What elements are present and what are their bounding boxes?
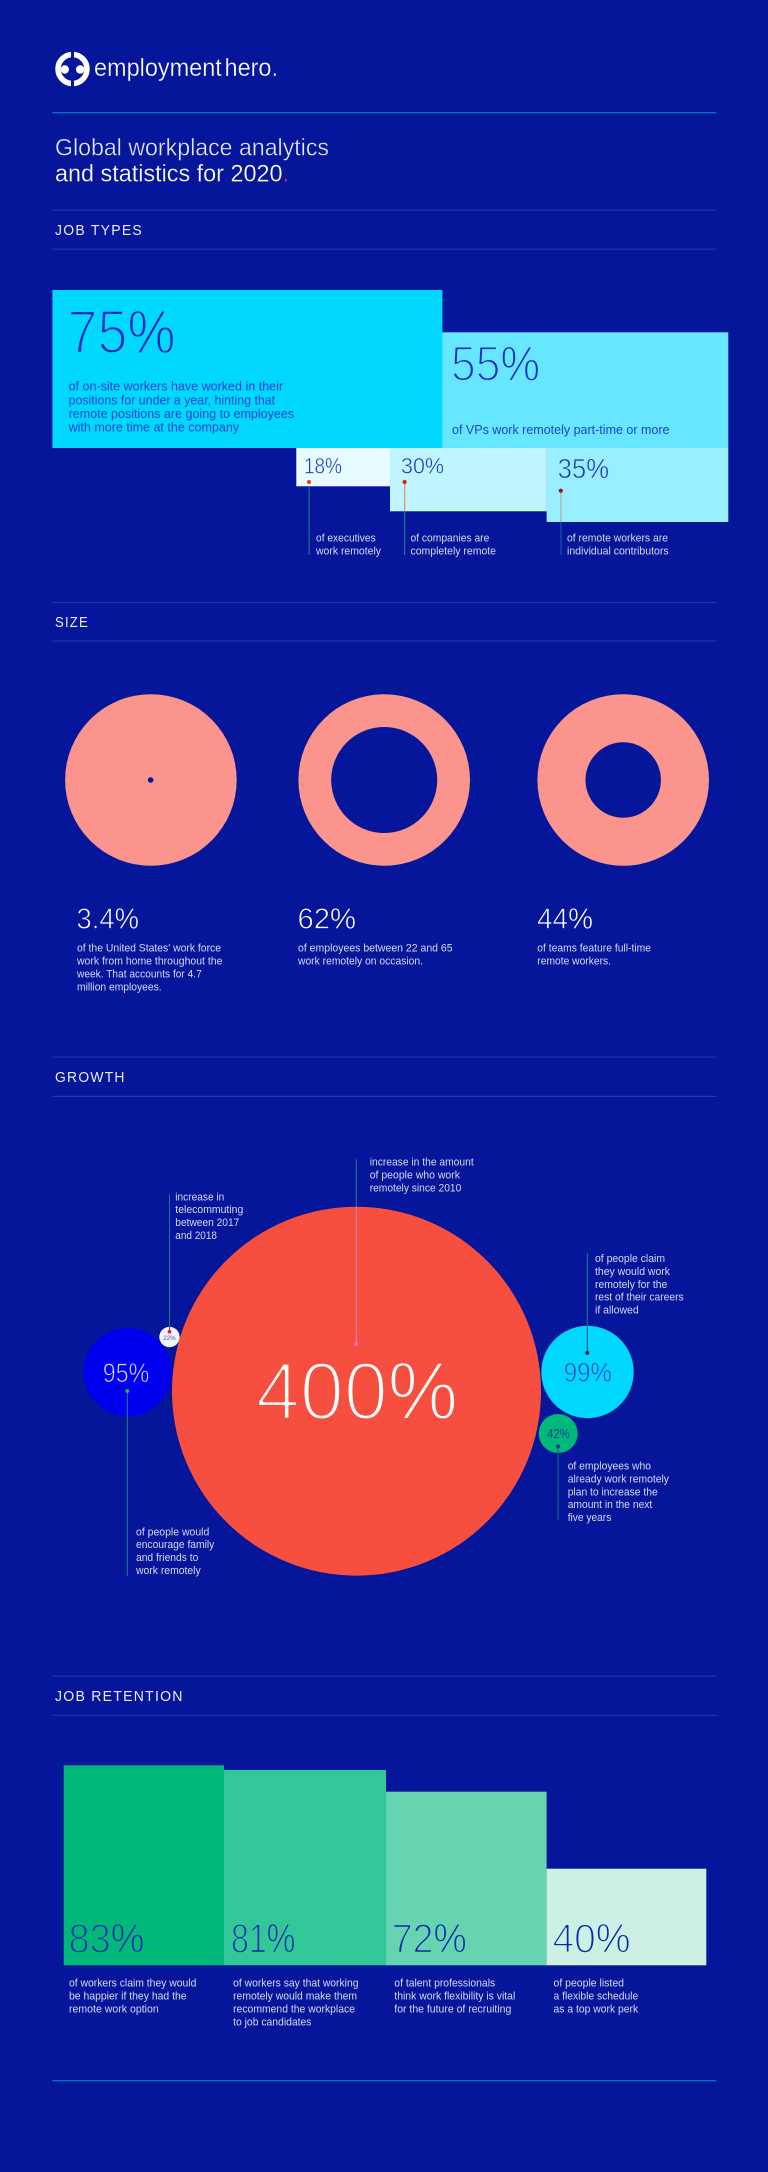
label: 22%: and 2018 xyxy=(175,1230,217,1242)
panel: growth xyxy=(84,1157,684,1577)
label: 99%: rest of their careers xyxy=(595,1292,684,1304)
label: 18%: work remotely xyxy=(315,545,381,557)
label: 18% xyxy=(315,532,381,557)
label: 18%: of executives xyxy=(316,532,376,544)
panel: 35% remote workers xyxy=(547,448,728,522)
panel: 75% on-site workers xyxy=(52,290,442,448)
stat: 62% xyxy=(297,903,453,968)
bubble: 400%: 400% xyxy=(256,1346,458,1437)
caption: 40% xyxy=(554,1977,639,2015)
panel: 75% on-site workers: remote positions are going to employees xyxy=(69,407,294,421)
bar: 40%: 40% xyxy=(552,1916,630,1962)
caption: 40%: a flexible schedule xyxy=(554,1990,638,2002)
callout: 95% leader line xyxy=(125,1389,129,1576)
bar: 83%: 83% xyxy=(68,1916,144,1962)
label: 42%: amount in the next xyxy=(568,1499,653,1511)
stat: 44% xyxy=(537,903,651,968)
title xyxy=(55,134,329,188)
stat: 62%: of employees between 22 and 65 xyxy=(298,943,453,955)
stat: 3.4%: work from home throughout the xyxy=(76,956,222,968)
bar: 72%: 72% xyxy=(392,1916,467,1962)
panel: 75% on-site workers: of on-site workers have worked in their xyxy=(69,380,283,394)
label: 30%: of companies are xyxy=(410,532,489,544)
panel: job types xyxy=(52,290,728,557)
panel: 55% VPs: of VPs work remotely part-time or more xyxy=(452,423,670,437)
stat: 3.4%: 3.4% xyxy=(76,903,139,935)
panel: 75% on-site workers: with more time at the company xyxy=(68,421,240,435)
stat: 3.4%: week. That accounts for 4.7 xyxy=(76,969,202,981)
bubble: 400% xyxy=(172,1207,541,1576)
stat: 44%: of teams feature full-time xyxy=(537,943,651,955)
icon: logo mark xyxy=(58,50,87,88)
panel: 55% VPs: 55% xyxy=(451,338,540,392)
label: 42%: plan to increase the xyxy=(568,1486,658,1498)
caption: 83% xyxy=(69,1977,196,2015)
callout: 30% leader line xyxy=(402,480,407,555)
label: 30% xyxy=(410,532,496,557)
stat: 62%: work remotely on occasion. xyxy=(297,956,423,968)
bubble: 95% xyxy=(84,1328,172,1416)
label: 99%: of people claim xyxy=(595,1253,665,1265)
bubble: 99% xyxy=(541,1326,634,1418)
bubble: 42%: 42% xyxy=(547,1427,570,1441)
label: 95%: encourage family xyxy=(136,1539,215,1551)
caption: 81%: to job candidates xyxy=(233,2016,312,2028)
label: 35% xyxy=(567,532,669,557)
caption: 72% xyxy=(394,1977,515,2015)
label: 42%: of employees who xyxy=(568,1461,651,1473)
panel: size xyxy=(65,694,709,994)
stat: 44%: 44% xyxy=(537,903,593,935)
chart: 3.4% donut xyxy=(65,694,237,866)
label: 99%: they would work xyxy=(595,1266,670,1278)
heading: size: SIZE xyxy=(55,615,89,631)
bar: 40% xyxy=(547,1869,706,1965)
label: 22%: between 2017 xyxy=(175,1217,239,1229)
label: 400%: remotely since 2010 xyxy=(370,1182,461,1194)
bubble: 22%: 22% xyxy=(163,1335,176,1342)
logo wordmark: employment hero. xyxy=(94,54,278,82)
label: 22%: telecommuting xyxy=(175,1204,243,1216)
caption: 72%: for the future of recruiting xyxy=(394,2003,511,2015)
caption: 81%: of workers say that working xyxy=(233,1977,358,1989)
label: 35%: individual contributors xyxy=(567,545,669,557)
panel: 55% VPs xyxy=(442,332,728,448)
caption: 40%: as a top work perk xyxy=(554,2003,639,2015)
label: 42% xyxy=(568,1461,669,1524)
panel: 18% executives: 18% xyxy=(304,454,342,479)
stat: 44%: remote workers. xyxy=(537,956,611,968)
label: 95%: and friends to xyxy=(136,1552,198,1564)
panel: 75% on-site workers: 75% xyxy=(68,298,176,366)
label: 22%: increase in xyxy=(175,1191,224,1203)
label: 400%: increase in the amount xyxy=(370,1157,475,1169)
stat: 3.4%: million employees. xyxy=(77,982,162,994)
label: 22% xyxy=(175,1191,243,1242)
label: 95% xyxy=(135,1526,215,1577)
caption: 72%: think work flexibility is vital xyxy=(394,1990,515,2002)
bubble: 42% xyxy=(539,1414,578,1453)
panel: 35% remote workers: 35% xyxy=(558,453,609,484)
label: 95%: work remotely xyxy=(135,1565,201,1577)
panel: 30% companies: 30% xyxy=(401,454,444,479)
caption: 83%: remote work option xyxy=(69,2003,159,2015)
callout: 42% leader line xyxy=(556,1444,560,1520)
heading: job retention: JOB RETENTION xyxy=(55,1689,184,1705)
label: 30%: completely remote xyxy=(410,545,496,557)
bar: 83% xyxy=(64,1765,224,1965)
label: 99% xyxy=(595,1253,684,1317)
panel: 75% on-site workers: positions for under a year, hinting that xyxy=(69,393,276,407)
label: 99%: remotely for the xyxy=(595,1279,667,1291)
bar: 81% xyxy=(224,1770,386,1965)
chart: 44% donut xyxy=(537,694,709,866)
heading: job types: JOB TYPES xyxy=(55,223,143,239)
panel: 30% companies xyxy=(390,448,547,511)
heading: growth: GROWTH xyxy=(55,1070,126,1086)
label: 95%: of people would xyxy=(136,1526,209,1538)
callout: 18% leader line xyxy=(307,480,311,555)
caption: 83%: of workers claim they would xyxy=(69,1977,196,1989)
stat: 62%: 62% xyxy=(298,903,356,935)
title: Global workplace analytics xyxy=(55,134,329,162)
label: 400%: of people who work xyxy=(370,1170,460,1182)
caption: 83%: be happier if they had the xyxy=(69,1990,187,2002)
caption: 72%: of talent professionals xyxy=(394,1977,496,1989)
callout: 35% leader line xyxy=(559,489,563,555)
label: 400% xyxy=(370,1157,475,1194)
callout: 99% leader line xyxy=(585,1253,589,1355)
bar: 81%: 81% xyxy=(231,1916,295,1962)
caption: 81% xyxy=(233,1977,358,2028)
label: 42%: already work remotely xyxy=(568,1474,669,1486)
caption: 40%: of people listed xyxy=(554,1977,624,1989)
bar: 72% xyxy=(386,1792,547,1965)
caption: 81%: remotely would make them xyxy=(233,1990,357,2002)
bubble: 95%: 95% xyxy=(103,1358,149,1388)
chart: 62% donut xyxy=(298,694,470,866)
caption: 81%: recommend the workplace xyxy=(233,2003,355,2015)
bubble: 99%: 99% xyxy=(564,1358,612,1388)
panel: 18% executives xyxy=(296,448,390,486)
logo: employment hero xyxy=(58,50,278,88)
bubble: 22% xyxy=(159,1327,180,1347)
callout: 22% leader line xyxy=(168,1194,171,1334)
label: 35%: of remote workers are xyxy=(567,532,668,544)
stat: 3.4%: of the United States' work force xyxy=(77,943,221,955)
label: 99%: if allowed xyxy=(595,1305,639,1317)
title: and statistics for 2020. xyxy=(55,161,289,188)
panel: job retention bar chart xyxy=(64,1765,706,2028)
label: 42%: five years xyxy=(568,1512,612,1524)
stat: 3.4% xyxy=(76,903,222,994)
callout: 400% leader line xyxy=(354,1159,358,1346)
